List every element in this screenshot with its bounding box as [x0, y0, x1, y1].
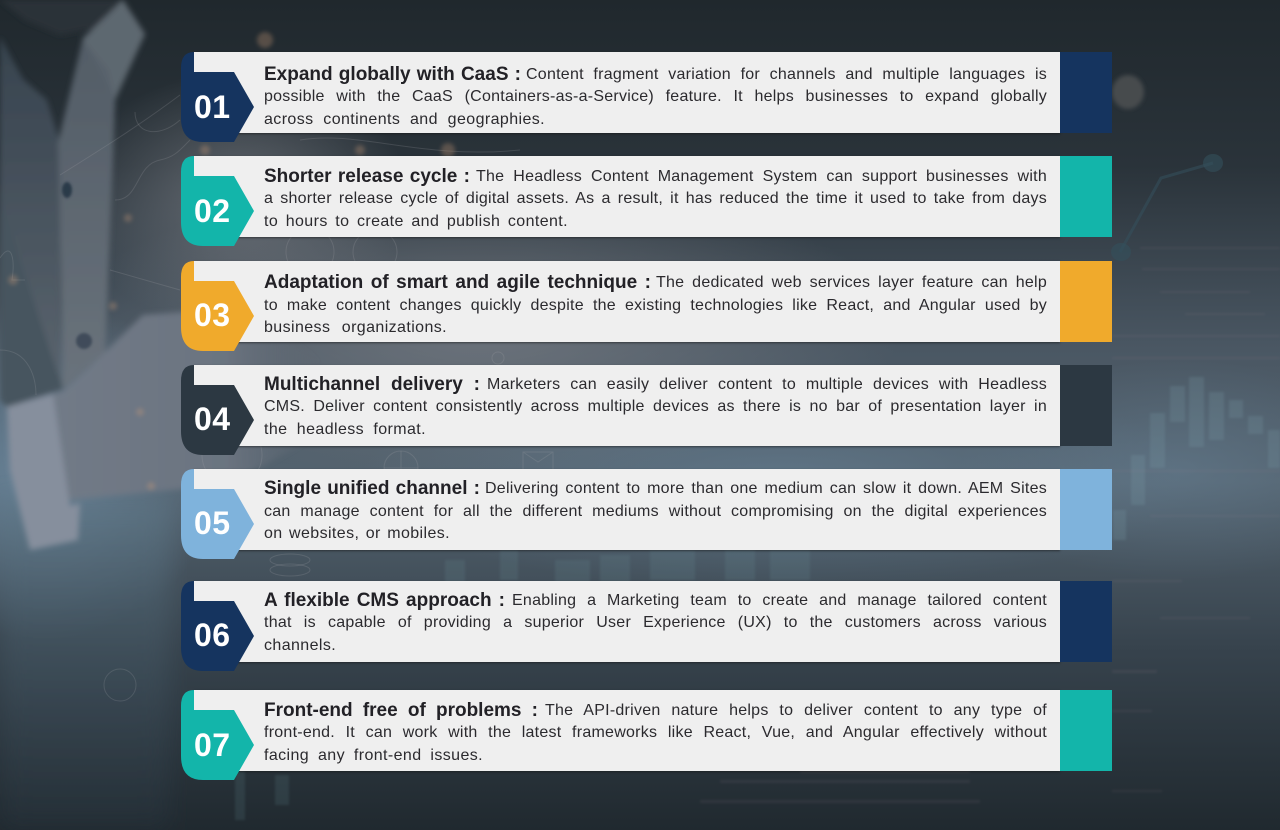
number: 06	[194, 617, 230, 653]
text block: front-end. It can work with the latest frameworks like React, Vue, and Angular effectively without	[264, 724, 1047, 741]
number badge	[181, 156, 254, 246]
text block	[264, 272, 1047, 336]
number badge	[181, 261, 254, 351]
heading: Expand globally with CaaS :	[264, 64, 521, 85]
text block: that is capable of providing a superior User Experience (UX) to the customers across various	[264, 614, 1047, 631]
text block: across continents and geographies.	[264, 111, 545, 128]
right colour block	[1060, 365, 1112, 446]
candlesticks, right	[1113, 377, 1280, 540]
text block: CMS. Deliver content consistently across multiple devices as there is no bar of presentation layer in	[264, 398, 1047, 415]
text block	[264, 478, 1047, 542]
text block: Content fragment variation for channels and multiple languages is	[526, 66, 1047, 83]
heading: Front-end free of problems :	[264, 700, 538, 721]
heading: Adaptation of smart and agile technique :	[264, 272, 651, 293]
right colour block	[1060, 52, 1112, 133]
horizontal price streaks	[700, 247, 1280, 803]
item 02: Shorter release cycle	[181, 156, 1112, 246]
text block: on websites, or mobiles.	[264, 525, 450, 542]
text block: channels.	[264, 637, 336, 654]
number: 03	[194, 297, 230, 333]
item 04: Multichannel delivery	[181, 365, 1112, 455]
item 06: A flexible CMS approach	[181, 581, 1112, 671]
text block	[264, 590, 1047, 654]
number: 04	[194, 401, 230, 437]
text block: Enabling a Marketing team to create and manage tailored content	[512, 592, 1047, 609]
man in suit	[0, 0, 320, 550]
item 03: Adaptation of smart and agile technique	[181, 261, 1112, 351]
chart line and dots, top right	[1111, 75, 1223, 261]
text block	[264, 374, 1047, 438]
text block	[264, 166, 1047, 230]
text panel	[194, 581, 1060, 662]
number badge	[181, 365, 254, 455]
number: 07	[194, 727, 230, 763]
item 07: Front-end free of problems	[181, 690, 1112, 780]
number badge	[181, 52, 254, 142]
right colour block	[1060, 581, 1112, 662]
number badge	[181, 581, 254, 671]
number badge	[181, 690, 254, 780]
heading: Shorter release cycle :	[264, 166, 470, 187]
item 01: Expand globally with CaaS	[181, 52, 1112, 142]
text panel	[194, 365, 1060, 446]
text block: can manage content for all the different mediums without compromising on the digital experiences	[264, 503, 1047, 520]
right colour block	[1060, 690, 1112, 771]
text panel	[194, 52, 1060, 133]
text panel	[194, 156, 1060, 237]
number: 02	[194, 193, 230, 229]
number: 01	[194, 89, 230, 125]
heading: Multichannel delivery :	[264, 374, 480, 395]
text block: The Headless Content Management System can support businesses with	[476, 168, 1047, 185]
right colour block	[1060, 261, 1112, 342]
text block: The API-driven nature helps to deliver content to any type of	[545, 702, 1047, 719]
text panel	[194, 469, 1060, 550]
text block: Marketers can easily deliver content to multiple devices with Headless	[487, 376, 1047, 393]
text block: a shorter release cycle of digital assets. As a result, it has reduced the time it used to take from days	[264, 190, 1047, 207]
text panel	[194, 690, 1060, 771]
text block: to make content changes quickly despite the existing technologies like React, and Angular used by	[264, 297, 1047, 314]
text block: Delivering content to more than one medium can slow it down. AEM Sites	[485, 480, 1047, 497]
text panel	[194, 261, 1060, 342]
text block: the headless format.	[264, 421, 426, 438]
text block: facing any front-end issues.	[264, 747, 483, 764]
text block: to hours to create and publish content.	[264, 213, 568, 230]
number: 05	[194, 505, 230, 541]
item 05: Single unified channel	[181, 469, 1112, 559]
text block: The dedicated web services layer feature can help	[656, 274, 1047, 291]
right colour block	[1060, 156, 1112, 237]
text block: possible with the CaaS (Containers-as-a-Service) feature. It helps businesses to expand globally	[264, 88, 1047, 105]
right colour block	[1060, 469, 1112, 550]
circuit lines and glow dots	[0, 95, 553, 701]
heading: Single unified channel :	[264, 478, 480, 499]
text block	[264, 64, 1047, 128]
text block: business organizations.	[264, 319, 447, 336]
number badge	[181, 469, 254, 559]
text block	[264, 700, 1047, 764]
faint candlesticks, centre	[235, 540, 810, 820]
heading: A flexible CMS approach :	[264, 590, 505, 611]
